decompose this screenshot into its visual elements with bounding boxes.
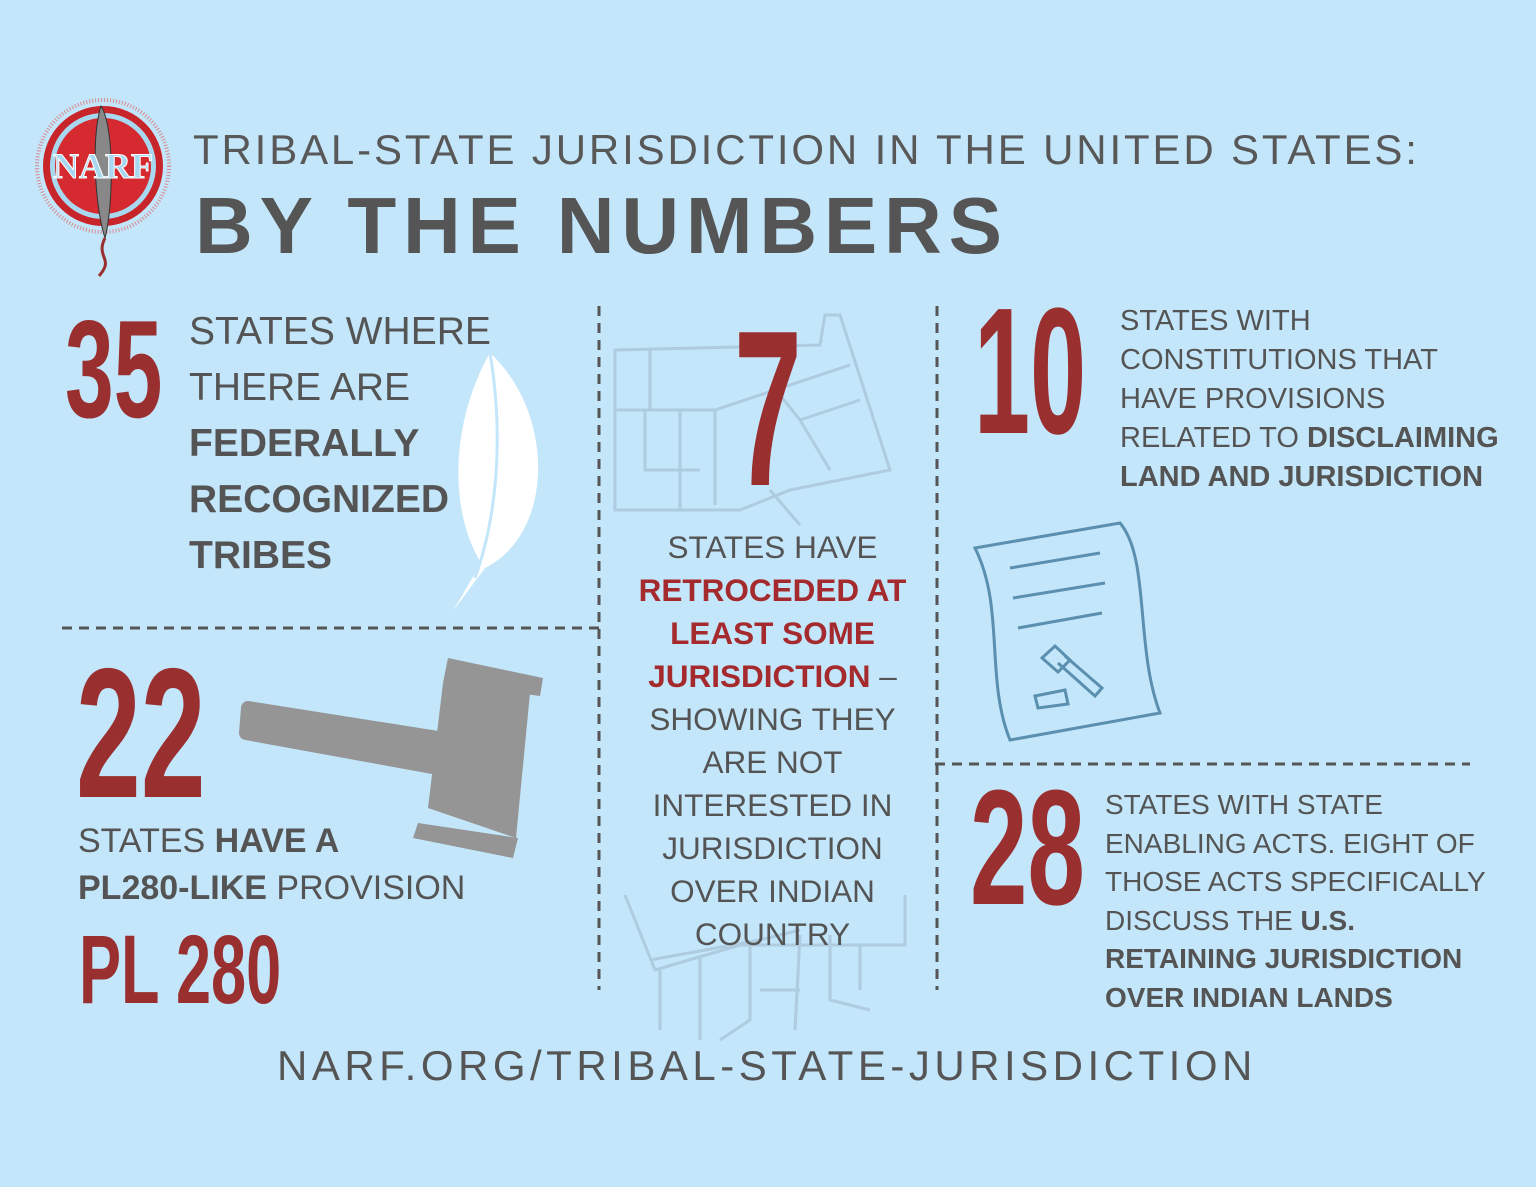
text: ENABLING ACTS. EIGHT OF [1105, 828, 1475, 858]
text: RECOGNIZED [189, 478, 449, 521]
text: PL280-LIKE PROVISION [78, 869, 465, 907]
panel: 7 [639, 285, 906, 952]
text: LEAST SOME [670, 615, 875, 651]
text: COUNTRY [695, 916, 850, 952]
panel: 28 [970, 756, 1486, 1012]
text: THOSE ACTS SPECIFICALLY [1105, 866, 1486, 897]
icon: feather [454, 354, 538, 610]
number 22: 22 [76, 631, 206, 837]
text: STATES HAVE [667, 529, 878, 565]
text: JURISDICTION [662, 830, 883, 866]
text: THERE ARE [189, 366, 410, 409]
text: RETROCEDED AT [639, 572, 906, 608]
text: LAND AND JURISDICTION [1120, 461, 1483, 493]
icon: document with gavel [972, 521, 1162, 742]
text: OVER INDIAN LANDS [1105, 982, 1393, 1012]
text: SHOWING THEY [649, 701, 896, 737]
number 7: 7 [734, 285, 802, 533]
number 35: 35 [65, 292, 162, 447]
text: STATES WHERE [189, 310, 491, 353]
text: ARE NOT [702, 744, 842, 780]
number 10: 10 [974, 271, 1086, 472]
text [1120, 305, 1499, 493]
title: TRIBAL-STATE JURISDICTION IN THE UNITED STATES: [193, 126, 1420, 173]
text: OVER INDIAN [670, 873, 875, 909]
logo: NARF [35, 98, 171, 277]
url: NARF.ORG/TRIBAL-STATE-JURISDICTION [277, 1042, 1257, 1089]
heading: BY THE NUMBERS [195, 181, 1009, 270]
text: STATES HAVE A [78, 822, 339, 860]
text: INTERESTED IN [653, 787, 892, 823]
text [189, 310, 491, 577]
text: TRIBES [189, 534, 332, 577]
text: JURISDICTION – [648, 658, 897, 694]
text: STATES WITH [1120, 305, 1311, 337]
logo: NARF: NARF [53, 146, 153, 186]
text: DISCUSS THE U.S. [1105, 904, 1355, 936]
text [639, 529, 906, 952]
text: RELATED TO DISCLAIMING [1120, 422, 1499, 454]
text [78, 822, 465, 907]
panel: 35 [65, 292, 538, 610]
text: FEDERALLY [189, 422, 419, 465]
text: RETAINING JURISDICTION [1105, 943, 1462, 974]
panel: 10 [972, 271, 1499, 742]
icon: gavel [239, 658, 543, 858]
number 28: 28 [970, 756, 1085, 939]
text [1105, 789, 1486, 1012]
PL 280: PL 280 [79, 915, 281, 1024]
panel: 22 [76, 631, 543, 1024]
text: STATES WITH STATE [1105, 789, 1383, 820]
text: CONSTITUTIONS THAT [1120, 344, 1438, 376]
text: HAVE PROVISIONS [1120, 383, 1385, 415]
